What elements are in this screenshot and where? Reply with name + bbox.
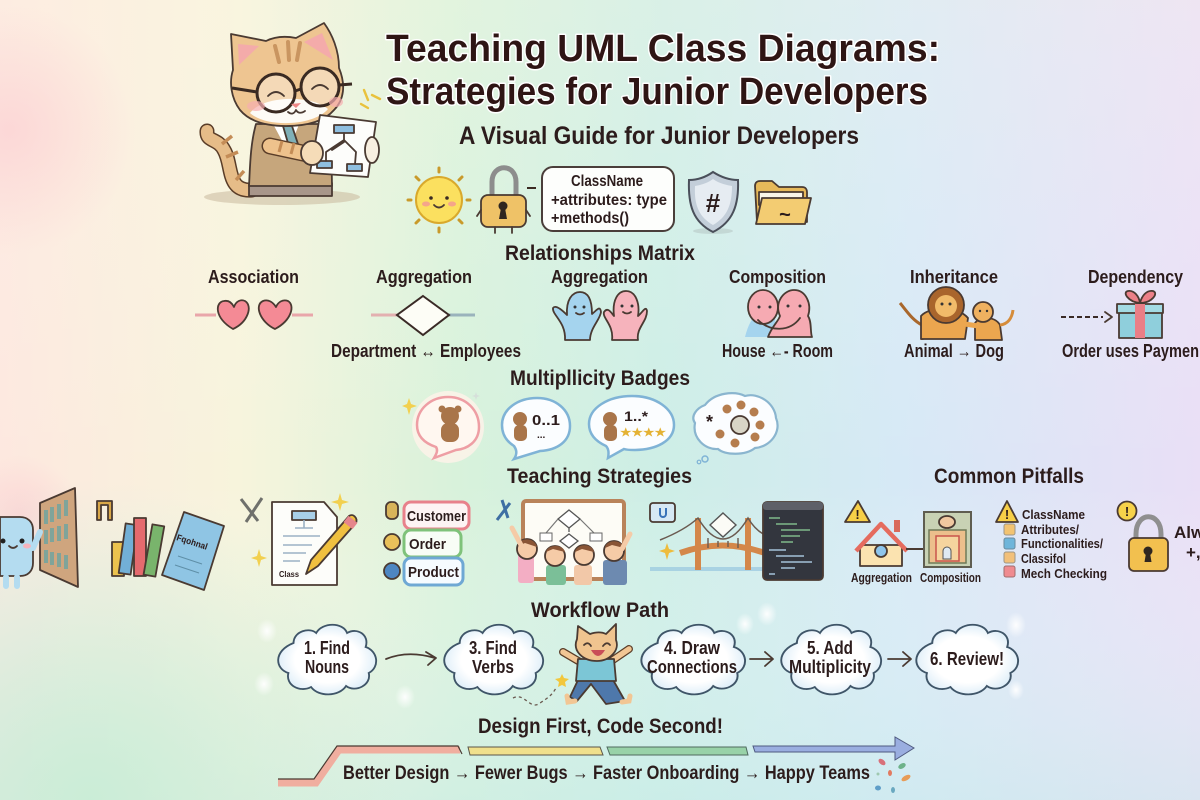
- relationship: association: [195, 267, 313, 329]
- badge: one or many: ★★★★: [620, 427, 666, 439]
- relationship: aggregation figures: [551, 267, 648, 340]
- benefits text: Better Design → Fewer Bugs → Faster Onboarding → Happy Teams: [343, 763, 870, 784]
- illustration: jumping cat: [513, 624, 630, 705]
- pitfall: aggregation versus composition: Aggregation: [851, 570, 912, 585]
- relationship: inheritance lions: [900, 267, 1013, 361]
- strategy: stack of books: Fqohnal: [175, 532, 209, 552]
- arrow: step 5 to step 6: [888, 652, 911, 666]
- badge: zero or one: ...: [537, 430, 546, 441]
- badge: one or many: 1..*: [624, 408, 649, 424]
- title: Strategies for Junior Developers: [386, 71, 928, 113]
- relationship: aggregation diamond: Department ↔ Employees: [331, 341, 521, 361]
- title: [386, 28, 940, 113]
- strategy: class name cards: [384, 502, 469, 585]
- workflow step 5: add multiplicity: [781, 625, 881, 694]
- class box: +methods(): [551, 210, 629, 227]
- pitfall: class checklist: !: [1005, 507, 1009, 522]
- progress arrow band: [278, 737, 914, 783]
- pitfall: class checklist: Mech Checking: [1021, 566, 1107, 581]
- pitfall: class checklist: ClassName: [1022, 507, 1085, 522]
- icon: folder, package visibility: ~: [779, 204, 791, 226]
- relationship: aggregation diamond: Aggregation: [376, 267, 472, 287]
- pitfall: lock reminder: !: [1125, 504, 1129, 519]
- heading: common pitfalls: Common Pitfalls: [934, 465, 1084, 488]
- pitfall: class checklist: Attributes/: [1021, 522, 1079, 537]
- strategy: bridge from diagram to code: [650, 502, 823, 580]
- strategy: team at whiteboard: [497, 500, 630, 585]
- strategy: stack of books: [97, 501, 224, 590]
- pitfall: aggregation versus composition: !: [855, 507, 860, 522]
- icon: sun, public visibility: [408, 168, 470, 232]
- subtitle: A Visual Guide for Junior Developers: [459, 122, 859, 150]
- workflow step 5: add multiplicity: Multiplicity: [789, 657, 871, 677]
- workflow step 4: draw connections: [641, 625, 745, 694]
- workflow step 4: draw connections: 4. Draw: [664, 638, 721, 658]
- relationship: dependency gift: [1061, 267, 1199, 361]
- relationship: composition figures: Composition: [729, 267, 826, 287]
- icon: shield, protected visibility: [689, 172, 738, 234]
- icon: padlock, private visibility: [477, 168, 536, 233]
- icon: shield, protected visibility: #: [706, 188, 721, 218]
- workflow step 6: review: 6. Review!: [930, 649, 1004, 669]
- workflow step 3: find verbs: Verbs: [472, 657, 514, 677]
- pitfall: lock reminder: [1118, 502, 1200, 571]
- badge: many cloud: *: [706, 412, 713, 432]
- icon: folder, package visibility: [755, 181, 811, 226]
- workflow step 5: add multiplicity: 5. Add: [807, 638, 853, 658]
- pitfall: aggregation versus composition: Composition: [920, 570, 981, 585]
- relationship: inheritance lions: Animal → Dog: [904, 341, 1004, 361]
- relationship: composition figures: [722, 267, 833, 361]
- icon: class diagram sheet: [310, 115, 376, 177]
- badge: zero or one: [502, 398, 570, 459]
- relationship: aggregation diamond: [331, 267, 521, 361]
- heading: design first, code second: Design First, Code Second!: [478, 715, 723, 738]
- heading: teaching strategies: Teaching Strategies: [507, 465, 692, 488]
- strategy: document and pencil: [241, 493, 356, 585]
- heading: relationships matrix: Relationships Matrix: [505, 242, 695, 265]
- workflow step 1: find nouns: 1. Find: [304, 638, 350, 658]
- badge: zero or one: 0..1: [532, 412, 560, 429]
- pitfall: class checklist: Classifol: [1021, 551, 1066, 566]
- heading: multiplicity badges: Multipllicity Badges: [510, 367, 690, 390]
- strategy: document and pencil: Class: [279, 570, 300, 579]
- card: customer: Customer: [407, 508, 466, 525]
- workflow step 3: find verbs: [444, 625, 543, 694]
- relationship: composition figures: House ←- Room: [722, 341, 833, 361]
- relationship: inheritance lions: Inheritance: [910, 267, 998, 287]
- pitfall: class checklist: [996, 501, 1107, 581]
- title: Teaching UML Class Diagrams:: [386, 28, 940, 70]
- heading: workflow path: Workflow Path: [531, 599, 669, 622]
- arrow: step 4 to step 5: [750, 652, 773, 666]
- icon: confetti: [875, 758, 912, 793]
- workflow step 1: find nouns: [278, 625, 376, 694]
- workflow step 6: review: [916, 625, 1018, 694]
- card: order: Order: [409, 536, 446, 553]
- class box: +attributes: type: [551, 192, 667, 209]
- class box: ClassName: [571, 173, 643, 190]
- workflow step 1: find nouns: Nouns: [305, 657, 349, 677]
- pitfall: class checklist: Functionalities/: [1021, 536, 1103, 551]
- workflow step 4: draw connections: Connections: [647, 657, 737, 677]
- relationship: association: Association: [208, 267, 299, 287]
- relationship: aggregation figures: Aggregation: [551, 267, 648, 287]
- badge: exactly one: [402, 391, 484, 463]
- workflow step 3: find verbs: 3. Find: [469, 638, 517, 658]
- pitfall: aggregation versus composition: [845, 501, 981, 585]
- badge: one or many: [589, 396, 674, 458]
- arrow: step 1 to step 3: [386, 652, 436, 665]
- strategy: robot at bookshelf: [0, 488, 78, 587]
- class box: [542, 167, 674, 231]
- relationship: dependency gift: Dependency: [1088, 267, 1183, 287]
- badge: many cloud: [693, 393, 778, 464]
- card: product: Product: [408, 564, 459, 581]
- decorative sparkles: [254, 602, 1026, 709]
- illustration: cat mascot holding a class diagram: [204, 23, 380, 205]
